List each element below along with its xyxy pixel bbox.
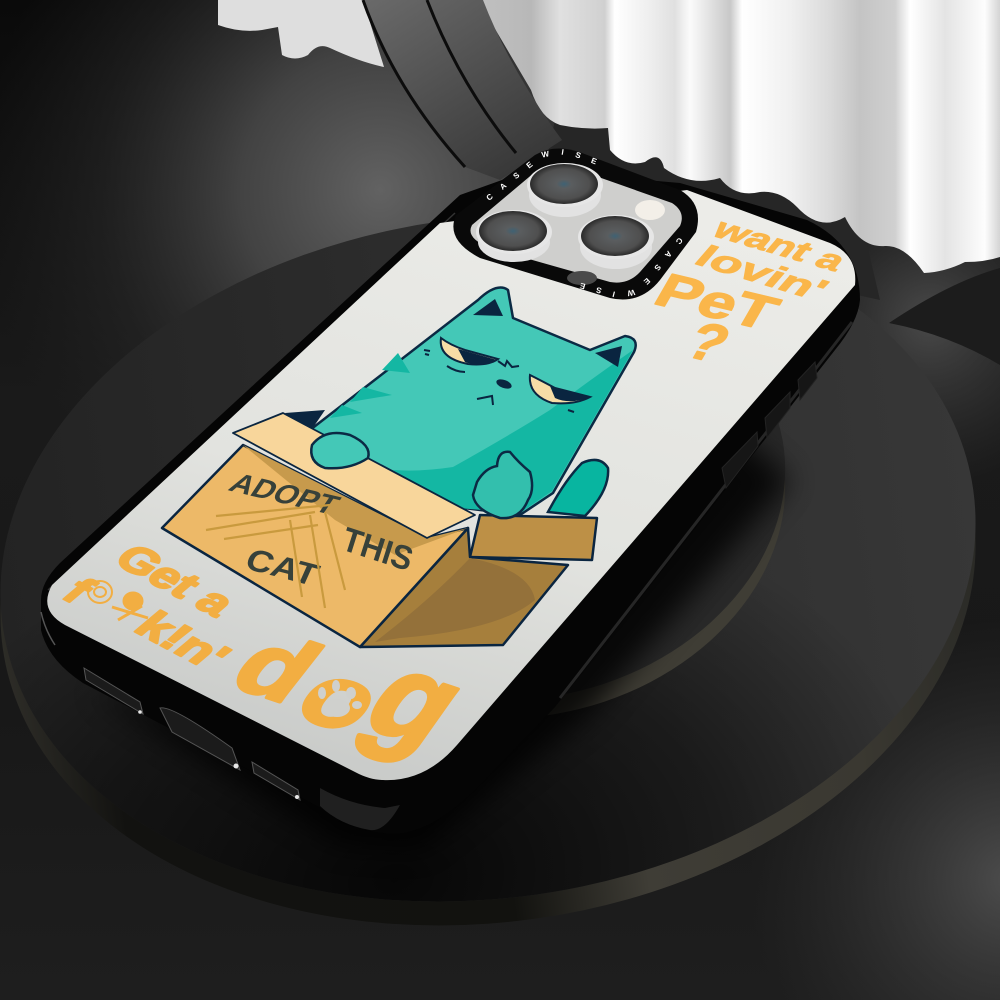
icon: paw print [318, 680, 362, 717]
box front face [162, 445, 468, 647]
cat right eye [530, 375, 590, 403]
cat right paw [473, 452, 532, 518]
curtain: right [478, 0, 1000, 273]
this: THIS [338, 520, 417, 579]
artwork: bottom slogan [52, 537, 493, 771]
right stand [889, 268, 1000, 365]
flash [635, 200, 665, 220]
artwork: top slogan [646, 212, 855, 373]
box side face [360, 528, 568, 647]
cat ears [473, 299, 622, 367]
dog: g [341, 629, 493, 771]
curtain: upper left [218, 0, 384, 67]
cat body [310, 288, 636, 515]
cat left paw [311, 433, 369, 468]
case edge highlights [41, 213, 852, 698]
want a: want a [704, 212, 855, 277]
pet: PeT [646, 264, 788, 340]
phone face [47, 190, 855, 780]
phone case [41, 170, 860, 834]
adopt: ADOPT [223, 468, 345, 520]
lovin': lovin' [687, 240, 836, 307]
cat: CAT [240, 542, 325, 593]
box lettering [223, 468, 417, 593]
cat face details [424, 350, 574, 412]
cat shading and stripes [330, 350, 633, 513]
side buttons [722, 362, 817, 488]
icon: skull [112, 592, 148, 620]
cat tail [548, 460, 608, 516]
box back [285, 410, 325, 432]
box side shade [375, 558, 535, 642]
brand text top: CASEWISE [486, 149, 597, 200]
phone corner gloss [320, 788, 400, 830]
brand text bottom: CASEWISE [580, 238, 682, 298]
sensor [567, 271, 597, 285]
dog: o [277, 645, 405, 751]
dark scallops behind curtain [540, 120, 880, 300]
lens 3 [578, 215, 654, 269]
platform: small disc [230, 231, 830, 771]
camera glass [470, 165, 682, 283]
icon: spiral [88, 581, 112, 603]
lens 1 [527, 163, 603, 217]
camera bump [453, 148, 698, 300]
box scratches [206, 505, 345, 608]
k!n': k!n' [124, 604, 241, 678]
port highlights [138, 710, 299, 799]
phone shadow [90, 400, 790, 850]
get a: Get a [104, 537, 246, 624]
box flap shadow [243, 445, 468, 555]
cat nose [495, 378, 513, 390]
question mark: ? [676, 311, 741, 373]
box open flap [233, 413, 475, 538]
arch stand [363, 0, 562, 180]
dog [213, 615, 493, 771]
lens 2 [476, 210, 552, 262]
dog: d [213, 615, 341, 721]
bottom ports [84, 668, 300, 800]
f: f [52, 571, 105, 611]
box right flap [470, 515, 597, 560]
cat left eye [441, 338, 498, 365]
